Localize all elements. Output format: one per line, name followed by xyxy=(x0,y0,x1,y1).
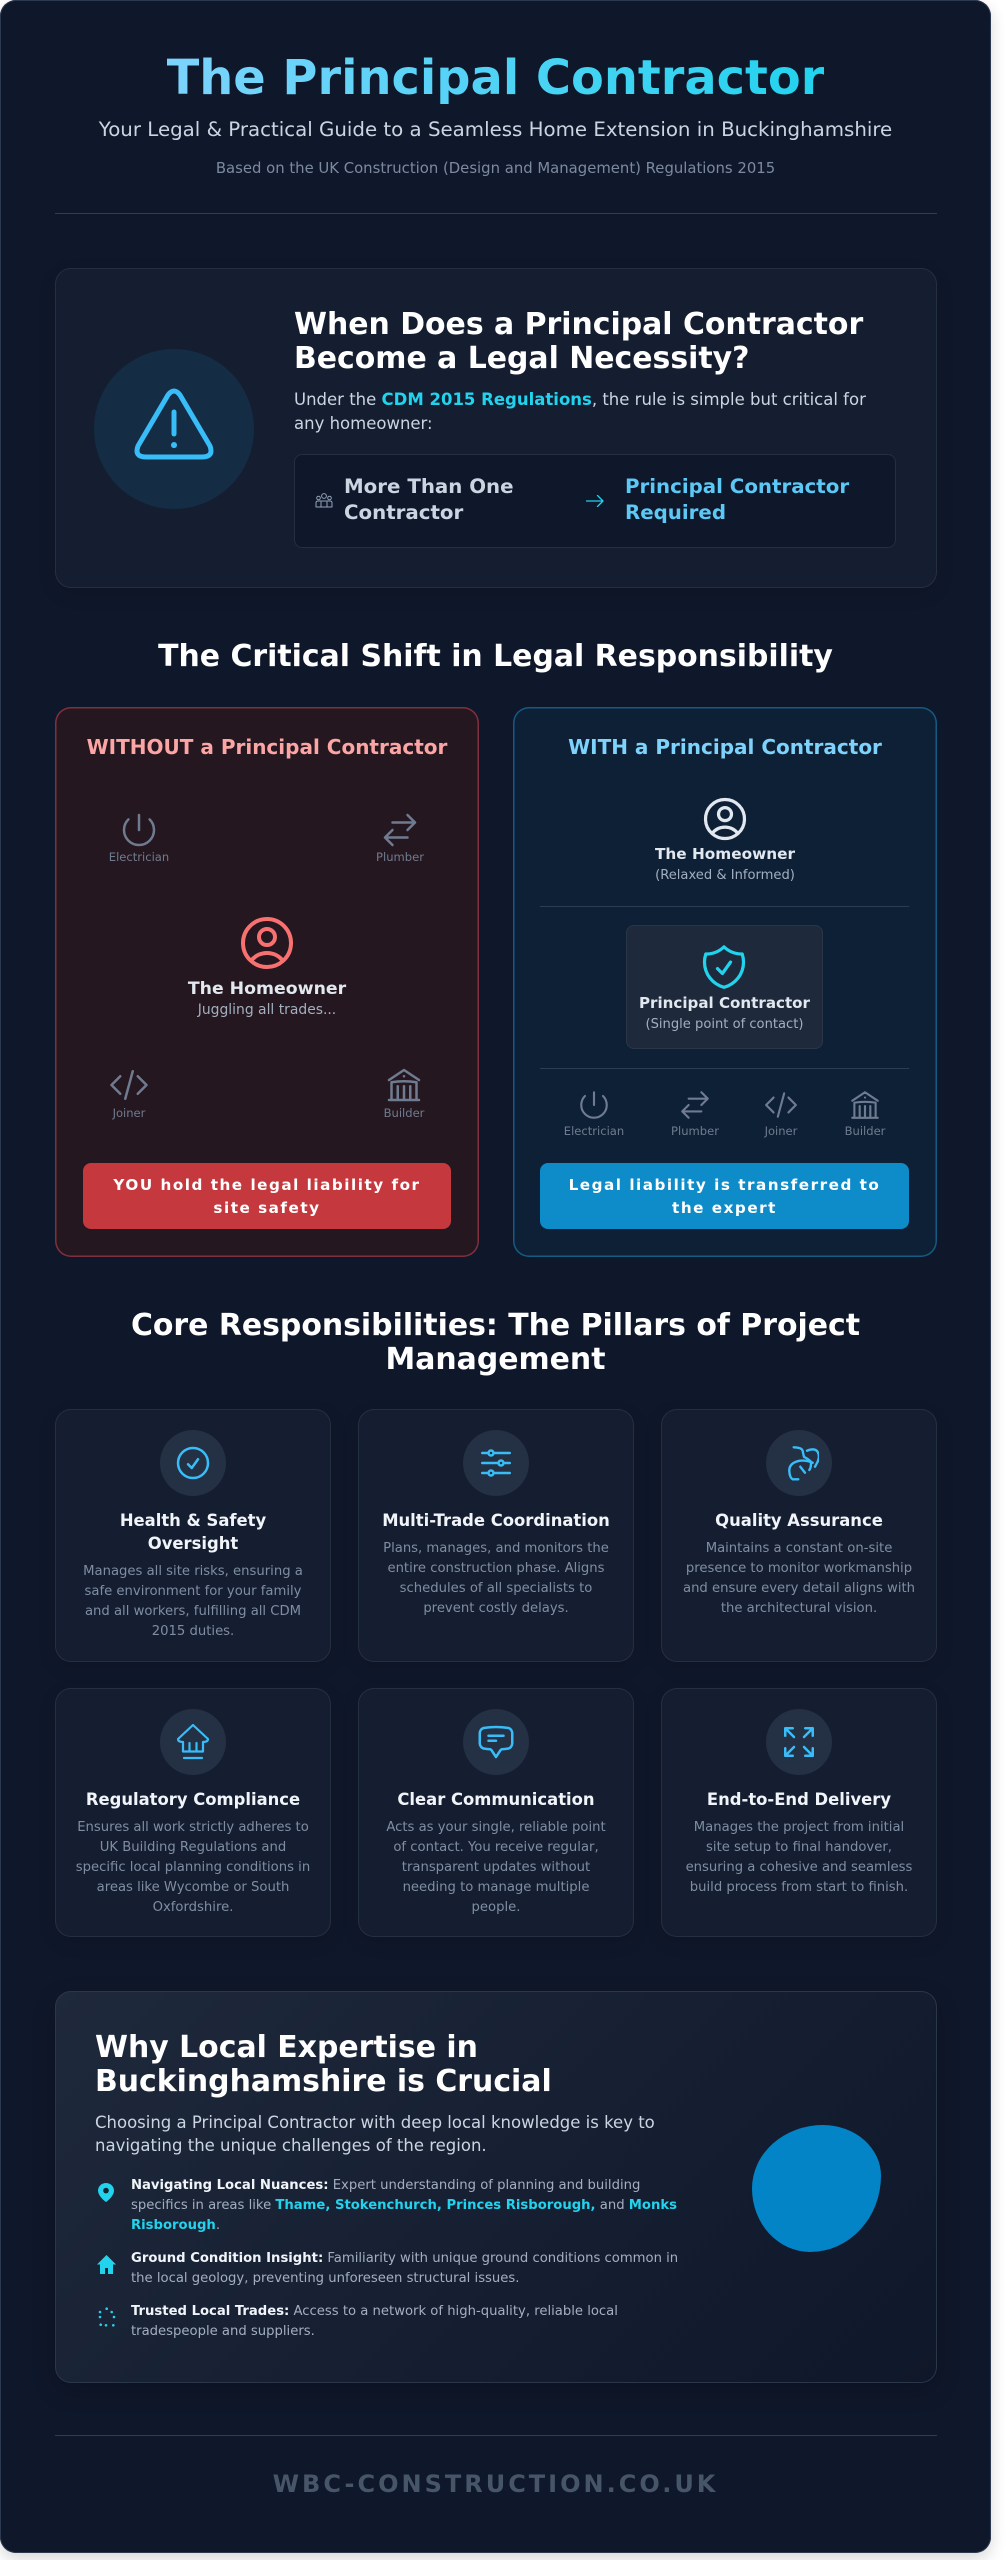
trade: builder xyxy=(384,1068,424,1120)
icon: shield check xyxy=(702,945,746,989)
card text: schedules of all specialists to xyxy=(400,1581,592,1596)
sublabel: (Relaxed & Informed) xyxy=(655,868,795,883)
heading: When Does a Principal Contractor xyxy=(294,307,863,342)
trade: electrician xyxy=(564,1091,624,1138)
card text: and ensure every detail aligns with xyxy=(683,1581,915,1596)
result text: Required xyxy=(625,501,726,524)
intro text: Under the CDM 2015 Regulations, the rule is simple but critical for xyxy=(294,390,866,409)
card: communication xyxy=(358,1688,634,1937)
condition text xyxy=(344,475,514,524)
liability banner: the expert xyxy=(672,1198,777,1216)
condition text: More Than One xyxy=(344,475,514,498)
trade: joiner xyxy=(110,1070,148,1120)
result text xyxy=(625,475,850,524)
regulation note: Based on the UK Construction (Design and Management) Regulations 2015 xyxy=(216,159,775,177)
icon: warning triangle xyxy=(94,349,254,509)
liability banner xyxy=(540,1163,909,1229)
subtitle: Your Legal & Practical Guide to a Seamless Home Extension in Buckinghamshire xyxy=(99,118,892,141)
liability banner: site safety xyxy=(213,1198,321,1216)
intro text: any homeowner: xyxy=(294,414,433,432)
card title: Oversight xyxy=(148,1534,238,1553)
heading: critical shift: The Critical Shift in Legal Responsibility xyxy=(158,639,833,674)
card text: prevent costly delays. xyxy=(423,1601,569,1616)
trade: plumber: Plumber xyxy=(671,1124,719,1138)
card text: ensuring a cohesive and seamless xyxy=(686,1860,912,1875)
icon: user xyxy=(241,917,293,969)
card text: presence to monitor workmanship xyxy=(686,1561,912,1576)
trade: electrician: Electrician xyxy=(109,850,169,864)
heading: core responsibilities: Core Responsibilities: The Pillars of Project xyxy=(131,1308,860,1343)
card text: Plans, manages, and monitors the xyxy=(383,1541,609,1556)
card text xyxy=(383,1541,609,1616)
panel title: WITH a Principal Contractor xyxy=(568,735,882,759)
sublabel: Juggling all trades... xyxy=(198,1002,336,1018)
trade: builder: Builder xyxy=(384,1106,424,1120)
card: health and safety xyxy=(55,1409,331,1662)
decorative blob xyxy=(752,2125,881,2252)
card text: Manages all site risks, ensuring a xyxy=(83,1564,303,1579)
label: The Homeowner xyxy=(188,979,346,999)
trade: electrician xyxy=(109,814,169,864)
icon: user xyxy=(704,798,746,840)
condition text: Contractor xyxy=(344,501,463,524)
heading xyxy=(294,307,864,376)
panel: local expertise xyxy=(55,1991,937,2383)
liability banner: YOU hold the legal liability for xyxy=(113,1176,421,1194)
card: quality xyxy=(661,1409,937,1662)
card title: Regulatory Compliance xyxy=(86,1790,300,1809)
card text xyxy=(683,1541,915,1616)
trade: electrician: Electrician xyxy=(564,1124,624,1138)
heading: Why Local Expertise in xyxy=(95,2030,478,2065)
card title: Clear Communication xyxy=(397,1790,595,1809)
label: The Homeowner xyxy=(655,845,795,863)
heading: core responsibilities: Management xyxy=(385,1342,606,1376)
card text: site setup to final handover, xyxy=(706,1840,892,1855)
icon: house xyxy=(97,2255,116,2274)
card text: and all workers, fulfilling all CDM xyxy=(85,1604,301,1619)
list item: ground conditions xyxy=(131,2251,678,2286)
heading: Become a Legal Necessity? xyxy=(294,340,749,376)
footer website: WBC-CONSTRUCTION.CO.UK xyxy=(273,2470,718,2498)
intro text xyxy=(95,2113,655,2155)
rule box xyxy=(294,454,896,548)
icon: expand arrows xyxy=(766,1709,832,1775)
card text: Acts as your single, reliable point xyxy=(386,1820,606,1835)
icon: house xyxy=(160,1709,226,1775)
principal contractor box xyxy=(626,925,823,1049)
card text: entire construction phase. Aligns xyxy=(387,1561,605,1576)
card title xyxy=(120,1511,266,1553)
card: compliance xyxy=(55,1688,331,1937)
heading xyxy=(95,2030,552,2098)
trade: plumber xyxy=(376,814,424,864)
label: Principal Contractor xyxy=(639,994,810,1012)
panel: without a principal contractor xyxy=(55,707,479,1257)
icon: people xyxy=(316,493,332,508)
card text xyxy=(686,1820,912,1895)
card text: Maintains a constant on-site xyxy=(706,1541,892,1556)
heading: Buckinghamshire is Crucial xyxy=(95,2064,552,2098)
icon: arrow xyxy=(586,495,604,507)
icon: chat bubble xyxy=(463,1709,529,1775)
list item: local nuances: Navigating Local Nuances: Expert understanding of planning and building xyxy=(131,2178,640,2193)
trade: builder xyxy=(845,1091,886,1138)
list item: ground conditions: Ground Condition Insight: Familiarity with unique ground conditions common in xyxy=(131,2251,678,2266)
list item: local nuances xyxy=(131,2178,677,2233)
icon: sliders xyxy=(463,1430,529,1496)
sublabel: (Single point of contact) xyxy=(646,1017,803,1032)
card text: transparent updates without xyxy=(402,1860,590,1875)
panel: with a principal contractor xyxy=(513,707,937,1257)
card text: the architectural vision. xyxy=(721,1601,877,1616)
list item: ground conditions: the local geology, preventing unforeseen structural issues. xyxy=(131,2271,519,2286)
card title: Health & Safety xyxy=(120,1511,266,1530)
card text: people. xyxy=(472,1900,520,1915)
card text xyxy=(83,1564,303,1639)
card text: Manages the project from initial xyxy=(694,1820,904,1835)
card: coordination xyxy=(358,1409,634,1662)
card text xyxy=(76,1820,310,1915)
trade: joiner xyxy=(764,1092,798,1138)
panel: legal necessity xyxy=(55,268,937,588)
liability banner xyxy=(83,1163,451,1229)
trade: joiner: Joiner xyxy=(113,1106,145,1120)
intro text xyxy=(294,390,866,432)
title: The Principal Contractor xyxy=(167,51,824,106)
card text: specific local planning conditions in xyxy=(76,1860,310,1875)
card text: Ensures all work strictly adheres to xyxy=(77,1820,309,1835)
liability banner: Legal liability is transferred to xyxy=(569,1176,880,1194)
card text: safe environment for your family xyxy=(85,1584,301,1599)
list item: local trades: tradespeople and suppliers. xyxy=(131,2324,315,2339)
icon: map pin xyxy=(98,2183,114,2202)
card text: UK Building Regulations and xyxy=(100,1840,286,1855)
icon: dotted network xyxy=(98,2307,116,2327)
card text: areas like Wycombe or South xyxy=(97,1880,289,1895)
card text: 2015 duties. xyxy=(152,1624,234,1639)
card text: needing to manage multiple xyxy=(403,1880,589,1895)
card title: Multi-Trade Coordination xyxy=(382,1511,610,1530)
list item: local nuances: specifics in areas like Thame, Stokenchurch, Princes Risborough, and Monks xyxy=(131,2198,677,2213)
card text: build process from start to finish. xyxy=(690,1880,908,1895)
card text: Oxfordshire. xyxy=(153,1900,233,1915)
card title: Quality Assurance xyxy=(715,1511,883,1530)
card title: End-to-End Delivery xyxy=(707,1790,891,1809)
card text: of contact. You receive regular, xyxy=(393,1840,599,1855)
icon: quality mark xyxy=(766,1430,832,1496)
card: delivery xyxy=(661,1688,937,1937)
intro text: Choosing a Principal Contractor with deep local knowledge is key to xyxy=(95,2113,655,2132)
icon: check circle xyxy=(160,1430,226,1496)
list item: local nuances: Risborough. xyxy=(131,2218,220,2233)
intro text: navigating the unique challenges of the region. xyxy=(95,2136,487,2155)
homeowner xyxy=(655,798,795,883)
list item: local trades: Trusted Local Trades: Access to a network of high-quality, reliable local xyxy=(131,2304,618,2319)
trade: builder: Builder xyxy=(845,1124,885,1138)
list item: local trades xyxy=(131,2304,618,2339)
panel title: WITHOUT a Principal Contractor xyxy=(87,735,447,759)
heading: core responsibilities xyxy=(131,1308,860,1376)
trade: plumber xyxy=(671,1091,719,1138)
trade: plumber: Plumber xyxy=(376,850,424,864)
result text: Principal Contractor xyxy=(625,475,849,498)
trade: joiner: Joiner xyxy=(765,1124,797,1138)
card text xyxy=(386,1820,606,1915)
homeowner xyxy=(188,917,346,1018)
